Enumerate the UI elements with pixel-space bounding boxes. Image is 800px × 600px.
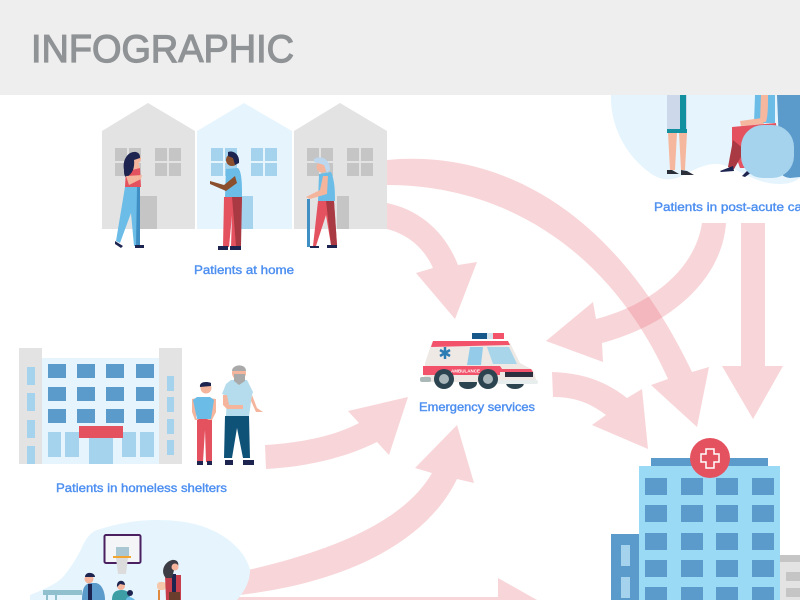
panel: community scene — [43, 535, 181, 600]
icon: basketball hoop — [104, 535, 140, 574]
building: left annex — [611, 534, 639, 600]
building: shelter — [19, 348, 182, 464]
label: Patients in homeless shelters — [56, 481, 227, 495]
person: man — [210, 152, 242, 250]
person: patient in wheelchair — [720, 95, 800, 178]
building: right annex — [780, 555, 800, 600]
panel: patients in post-acute care — [654, 95, 800, 214]
chair — [157, 582, 166, 600]
person: woman — [115, 152, 144, 248]
arrow: emergency services to hospital — [552, 372, 648, 449]
label: Patients in post-acute care — [654, 200, 800, 214]
table — [43, 590, 82, 600]
title: INFOGRAPHIC — [31, 28, 294, 71]
label: Patients at home — [194, 263, 294, 277]
person: boy — [192, 382, 216, 465]
person: doctor — [667, 95, 694, 175]
house: middle — [197, 103, 292, 229]
person: woman and child — [112, 581, 135, 600]
person: man in blue shirt — [82, 573, 105, 600]
house: right — [294, 103, 387, 229]
person: older man — [222, 365, 263, 465]
title bar — [0, 0, 800, 95]
panel: emergency services — [419, 333, 538, 414]
person: older woman with cane — [306, 157, 337, 248]
panel: hospital — [611, 438, 800, 600]
arrow: community to hospital — [230, 578, 537, 600]
building: main tower — [639, 458, 780, 600]
icon: ambulance: AMBULANCE — [451, 368, 480, 374]
arrow: homeless shelters to emergency services — [265, 397, 408, 469]
house: left — [102, 103, 195, 229]
icon: red cross badge — [690, 438, 730, 478]
panel: patients in homeless shelters — [19, 348, 263, 495]
arrow: home to hospital — [387, 159, 709, 427]
panel: post-acute care blob — [611, 95, 800, 184]
arrow: post-acute care to hospital — [722, 223, 783, 419]
arrow: home to emergency services — [387, 203, 477, 319]
panel: patients at home — [102, 103, 387, 277]
arrow: post-acute care to emergency services — [546, 223, 726, 362]
panel: bottom-left community blob — [30, 520, 250, 600]
label: Emergency services — [419, 400, 535, 414]
person: woman in red coat — [163, 560, 181, 600]
arrow: community to emergency services — [230, 425, 474, 596]
